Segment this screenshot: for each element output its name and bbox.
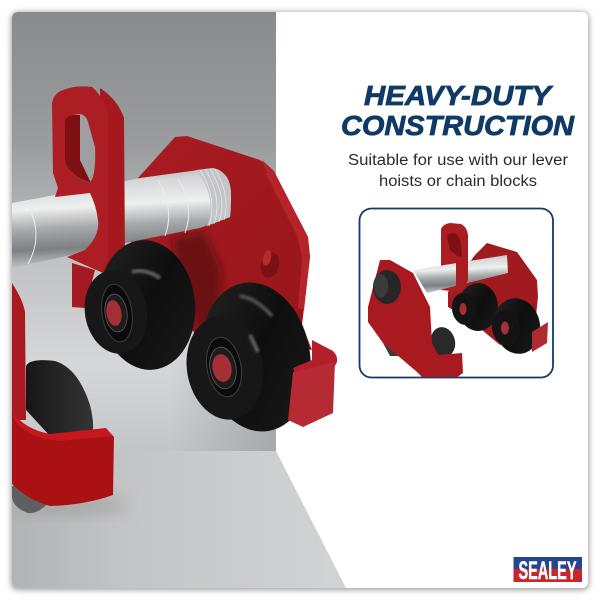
Sealey logo	[514, 557, 582, 585]
inset rear plate	[448, 243, 538, 345]
inset product artwork	[368, 223, 548, 380]
rod grooves	[28, 179, 189, 264]
left leg	[12, 283, 26, 420]
heading line 1: HEAVY-DUTY	[364, 80, 553, 111]
inset rear wheel 1	[458, 283, 498, 331]
inset lower wheel	[428, 324, 458, 360]
red end clip	[288, 340, 337, 427]
front wheel highlight	[240, 296, 272, 316]
eye plate side band	[100, 88, 125, 273]
inset rear wheel 1 flange	[449, 291, 479, 327]
rear side plate	[130, 136, 312, 350]
inset rod	[413, 255, 508, 293]
inset product panel	[360, 208, 553, 380]
front wheel red cap	[212, 354, 232, 382]
lower wheel grey tread	[12, 486, 48, 513]
rod thread lines	[200, 169, 226, 226]
plate highlight edge	[262, 160, 310, 310]
inset rear wheel 1 cap	[460, 303, 466, 315]
inset eye slot	[447, 233, 462, 260]
clip face	[288, 362, 335, 427]
front wheel bearing	[209, 346, 237, 390]
wall	[12, 12, 276, 451]
inset grey tread	[383, 343, 400, 356]
rear wheel bearing	[104, 294, 128, 332]
rear wheel hub ring	[101, 284, 133, 342]
logo red band	[514, 569, 582, 582]
rear wheel flange	[84, 272, 147, 354]
inset nut	[373, 270, 401, 304]
red foot top highlight	[13, 412, 113, 441]
lug highlight	[262, 250, 272, 266]
eye plate face	[52, 86, 108, 273]
plate lug	[260, 252, 280, 278]
red foot	[12, 412, 114, 506]
rear wheel highlight	[132, 271, 160, 278]
wall lower right shading	[195, 397, 276, 451]
inset rear wheel 2 cap	[501, 322, 509, 334]
inset eye plate	[441, 223, 468, 292]
rear wheel red cap	[106, 300, 122, 326]
heading	[341, 80, 575, 141]
rod threaded end	[196, 168, 231, 226]
rear wheel	[84, 240, 196, 370]
soft floor shadow	[32, 495, 125, 518]
inset frame	[360, 208, 553, 378]
front wheel flange	[186, 320, 262, 420]
lower left trolley section	[12, 283, 114, 513]
inset eye plate lower	[456, 255, 468, 292]
rear wheel body	[104, 240, 196, 370]
front wheel hub ring	[206, 336, 242, 398]
main product: beam trolley close-up	[10, 86, 337, 515]
rear plate tab	[72, 263, 95, 308]
inset rear wheel 2 flange	[489, 307, 523, 349]
floor	[12, 451, 346, 588]
description line 1: Suitable for use with our lever	[348, 152, 568, 169]
plate shadow below rod	[172, 232, 222, 335]
inset rear wheel 2	[489, 294, 545, 358]
eye slot opening	[65, 114, 95, 183]
logo blue band	[514, 557, 582, 569]
front wheel	[186, 282, 311, 432]
lower wheel	[26, 360, 93, 436]
front wheel highlight lower	[250, 335, 258, 352]
eye slot inner wall	[65, 115, 91, 183]
front wheel body	[206, 282, 311, 432]
inset front plate	[368, 260, 463, 380]
description line 2: hoists or chain blocks	[379, 173, 537, 190]
clip top band	[293, 340, 338, 372]
background scene: wall and floor	[12, 12, 346, 588]
heading line 2: CONSTRUCTION	[341, 110, 575, 141]
inset nut face	[374, 274, 388, 298]
description text	[348, 152, 568, 190]
rod	[12, 168, 231, 268]
inset clip	[532, 322, 548, 352]
